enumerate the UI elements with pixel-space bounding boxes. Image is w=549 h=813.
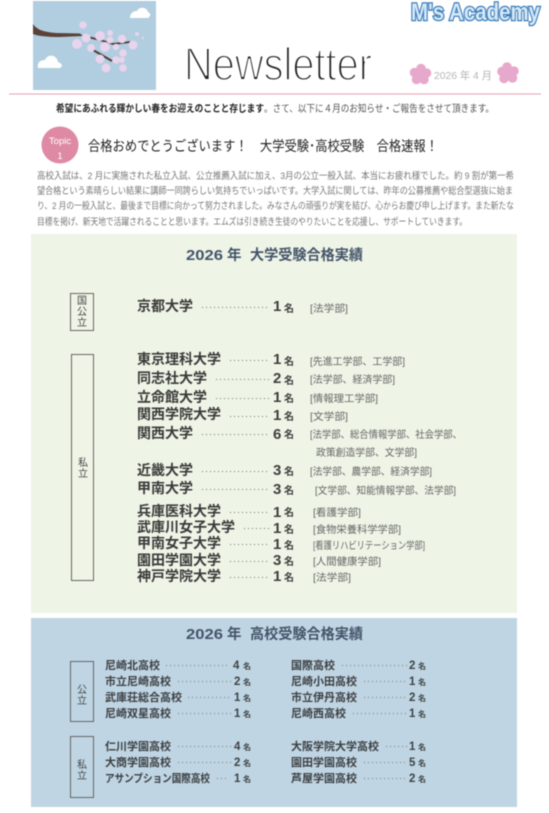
row: Kokusai <box>291 658 426 672</box>
row: Daisho Gakuen: 2 <box>234 757 240 769</box>
row: Ichiritsu Amagasaki <box>105 674 251 688</box>
row: Nigawa Gakuin: 仁川学園高校 <box>105 739 171 753</box>
heading: university results: 大学受験合格実績 <box>250 246 363 264</box>
greeting: 希望にあふれる輝かしい春をお迎えのことと存じます <box>56 102 264 115</box>
row: Daisho Gakuen: 大商学園高校 <box>105 755 171 769</box>
row: Konan Women's: [看護リハビリテーション学部] <box>313 539 425 552</box>
row: Ichiritsu Itami <box>291 690 426 704</box>
row: Kwansei Gakuin: 1 <box>273 407 281 424</box>
row: Osaka Gakuin: 大阪学院大学高校 <box>291 739 379 753</box>
label: public: 公 <box>77 684 87 696</box>
row: Amagasaki Kita: 尼崎北高校 <box>105 658 160 672</box>
row: Sonoda: 3 <box>273 552 281 569</box>
row: Kobe Gakuin: 1 <box>273 568 281 585</box>
row: Sonoda Gakuen: 園田学園高校 <box>291 755 357 769</box>
row: Kansai: [法学部、総合情報学部、社会学部、 <box>310 428 462 441</box>
row: Hyogo Ika <box>137 503 361 521</box>
panel: university results <box>31 234 517 613</box>
row: Amagasaki Oda: 名 <box>418 677 426 687</box>
row: Amagasaki Oda: 尼崎小田高校 <box>291 674 357 688</box>
label: public <box>70 662 94 722</box>
row: Amagasaki Kita: 名 <box>243 661 251 671</box>
row: Kwansei Gakuin <box>137 406 348 424</box>
row: Ashiya Gakuen <box>291 771 426 785</box>
row: Osaka Gakuin: 名 <box>418 742 426 752</box>
row: Amagasaki Sosei: 名 <box>243 709 251 719</box>
row: Kwansei Gakuin: [文学部] <box>310 410 348 423</box>
row: Hyogo Ika: 1 <box>273 504 281 521</box>
row: Ashiya Gakuen: 名 <box>418 774 426 784</box>
intro paragraph: 目標を掲げ、新天地で活躍されることと思います。エムズは引き続き生徒のやりたいことを応援し、サポートしていきます。 <box>37 216 467 227</box>
row: Mukogawa: [食物栄養科学学部] <box>313 523 401 536</box>
row: Sonoda: 名 <box>284 555 294 568</box>
label: private: 立 <box>77 769 87 782</box>
row: Hyogo Ika: 名 <box>284 506 294 519</box>
row: Sonoda Gakuen: 名 <box>418 758 426 768</box>
row: Amagasaki Oda: 1 <box>409 676 416 688</box>
label: national and public: 立 <box>77 316 87 329</box>
row: Kobe Gakuin <box>137 568 351 585</box>
row: Konan: 名 <box>284 484 294 497</box>
row: Nigawa Gakuin <box>105 739 251 753</box>
row: Amagasaki Kita <box>105 658 251 672</box>
row: Kwansei Gakuin: 名 <box>284 410 294 423</box>
row: Nigawa Gakuin: 4 <box>234 741 241 753</box>
row: Ashiya Gakuen: 2 <box>409 773 415 785</box>
row: Konan: 3 <box>273 481 281 498</box>
row: Kyoto: 名 <box>284 302 294 315</box>
row: Sonoda: [人間健康学部] <box>313 555 381 568</box>
row: Sonoda Gakuen <box>291 755 426 769</box>
row: Kindai: 3 <box>273 462 281 479</box>
row: Sonoda <box>137 552 381 569</box>
row: Ritsumeikan: 1 <box>273 389 281 406</box>
row: Kansai: 6 <box>273 426 281 443</box>
row: Tokyo Rika: 1 <box>273 351 281 368</box>
row: Konan Women's: 甲南女子大学 <box>137 535 221 551</box>
row: Kyoto: 京都大学 <box>137 298 193 314</box>
row: Kwansei Gakuin: 関西学院大学 <box>137 406 221 422</box>
heading: university results <box>186 246 363 264</box>
panel: high school results <box>31 618 517 807</box>
heading: high school results: 年 <box>227 625 242 643</box>
heading: high school results: 高校受験合格実績 <box>250 625 363 643</box>
row: Kokusai: 国際高校 <box>291 658 335 672</box>
row: Kobe Gakuin: 名 <box>284 571 294 584</box>
row: Ritsumeikan: 名 <box>284 392 294 405</box>
row: Konan: [文学部、知能情報学部、法学部] <box>315 484 456 497</box>
row: Amagasaki Sosei <box>105 706 251 720</box>
label: private <box>72 354 94 580</box>
row: Musoso Sogo <box>105 690 251 704</box>
row: Doshisha <box>137 370 395 387</box>
row: Kansai: 政策創造学部、文学部] <box>316 446 417 459</box>
row: Ichiritsu Amagasaki: 市立尼崎高校 <box>105 674 171 688</box>
label: private <box>70 736 94 798</box>
row: Kyoto: 1 <box>273 298 281 315</box>
row: Amagasaki Nishi: 名 <box>418 709 426 719</box>
row: Konan: 甲南大学 <box>137 480 193 496</box>
label: private: 私 <box>78 457 88 469</box>
row: Assumption Kokusai: 1 <box>234 773 241 785</box>
row: Mukogawa: 武庫川女子大学 <box>137 519 235 535</box>
row: Daisho Gakuen: 名 <box>243 758 251 768</box>
row: Amagasaki Nishi: 1 <box>409 708 416 720</box>
row: Kobe Gakuin: 神戸学院大学 <box>137 568 221 584</box>
row: Amagasaki Nishi <box>291 706 426 720</box>
topic badge: Topic <box>49 136 71 147</box>
row: Ichiritsu Itami: 2 <box>409 692 415 704</box>
row: Tokyo Rika: [先進工学部、工学部] <box>310 355 405 368</box>
topic badge: 1 <box>57 151 63 162</box>
row: Musoso Sogo: 名 <box>243 693 251 703</box>
row: Kindai: 近畿大学 <box>137 462 193 478</box>
row: Hyogo Ika: 兵庫医科大学 <box>137 503 221 519</box>
intro paragraph <box>37 170 514 227</box>
title: Newsletter: Newsletter <box>184 38 372 90</box>
row: Ichiritsu Amagasaki: 名 <box>243 677 251 687</box>
row: Daisho Gakuen <box>105 755 251 769</box>
row: Tokyo Rika: 名 <box>284 355 294 368</box>
row: Osaka Gakuin <box>291 739 426 753</box>
greeting: 。さて、以下に４月のお知らせ・ご報告をさせて頂きます。 <box>264 102 494 115</box>
row: Kokusai: 2 <box>409 660 415 672</box>
row: Konan Women's: 名 <box>284 539 294 552</box>
label: national and public: 国 <box>77 295 87 307</box>
icon: right sakura flower <box>497 62 519 83</box>
row: Sonoda Gakuen: 5 <box>409 757 416 769</box>
row: Musoso Sogo: 武庫荘総合高校 <box>105 690 182 704</box>
row: Konan Women's <box>137 535 425 553</box>
row: Kobe Gakuin: [法学部] <box>313 571 351 584</box>
row: Ritsumeikan: [情報理工学部] <box>310 392 378 405</box>
row: Tokyo Rika <box>137 351 405 368</box>
row: Amagasaki Nishi: 尼崎西高校 <box>291 706 346 720</box>
date: 2026 年 4 月 <box>434 69 492 82</box>
row: Tokyo Rika: 東京理科大学 <box>137 351 221 367</box>
row: Ritsumeikan: 立命館大学 <box>137 389 207 405</box>
label: private: 私 <box>77 759 87 771</box>
row: Ashiya Gakuen: 芦屋学園高校 <box>291 771 357 785</box>
label: private: 立 <box>78 467 88 480</box>
greeting <box>56 102 494 115</box>
row: Kindai: [法学部、農学部、経済学部] <box>310 465 432 478</box>
row: Ichiritsu Itami: 市立伊丹高校 <box>291 690 357 704</box>
row: Konan <box>137 480 456 498</box>
row: Amagasaki Sosei: 尼崎双星高校 <box>105 706 171 720</box>
row: Kyoto <box>137 298 348 315</box>
heading: university results: 年 <box>227 246 242 264</box>
row: Kindai: 名 <box>284 465 294 478</box>
label: national and public: 公 <box>77 306 87 318</box>
row: Ichiritsu Amagasaki: 2 <box>234 676 240 688</box>
row: Mukogawa <box>137 519 401 537</box>
row: Ichiritsu Itami: 名 <box>418 693 426 703</box>
row: Hyogo Ika: [看護学部] <box>313 506 361 519</box>
heading: university results: 2026 <box>186 248 223 264</box>
row: Doshisha: 名 <box>284 374 294 387</box>
row: Sonoda: 園田学園大学 <box>137 552 221 568</box>
row: Doshisha: 2 <box>273 370 281 387</box>
row: Konan Women's: 1 <box>273 536 281 553</box>
row: Kansai <box>137 425 462 459</box>
row: Kindai <box>137 462 432 479</box>
heading: high school results <box>186 625 363 643</box>
row: Amagasaki Sosei: 1 <box>234 708 241 720</box>
topic badge <box>42 126 78 164</box>
row: Assumption Kokusai: 名 <box>243 774 251 784</box>
row: Amagasaki Kita: 4 <box>233 660 240 672</box>
label: public: 立 <box>77 694 87 707</box>
row: Osaka Gakuin: 1 <box>409 741 416 753</box>
row: Ritsumeikan <box>137 389 378 406</box>
row: Kokusai: 名 <box>418 661 426 671</box>
row: Doshisha: [法学部、経済学部] <box>310 373 395 386</box>
row: Mukogawa: 1 <box>273 520 281 537</box>
row: Kansai: 関西大学 <box>137 425 193 441</box>
illustration: cherry blossom branch <box>33 1 156 90</box>
label: national and public <box>70 294 94 330</box>
row: Nigawa Gakuin: 名 <box>243 742 251 752</box>
icon: left sakura flower <box>410 64 431 84</box>
heading: high school results: 2026 <box>186 627 223 643</box>
row: Kyoto: [法学部] <box>310 302 348 315</box>
row: Doshisha: 同志社大学 <box>137 370 207 386</box>
row: Mukogawa: 名 <box>284 523 294 536</box>
row: Kansai: 名 <box>284 428 294 441</box>
row: Amagasaki Oda <box>291 674 426 688</box>
topic heading: 合格おめでとうございます！ 大学受験･高校受験 合格速報！ <box>88 138 438 154</box>
row: Assumption Kokusai: アサンプション国際高校 <box>105 771 210 785</box>
row: Musoso Sogo: 1 <box>234 692 241 704</box>
